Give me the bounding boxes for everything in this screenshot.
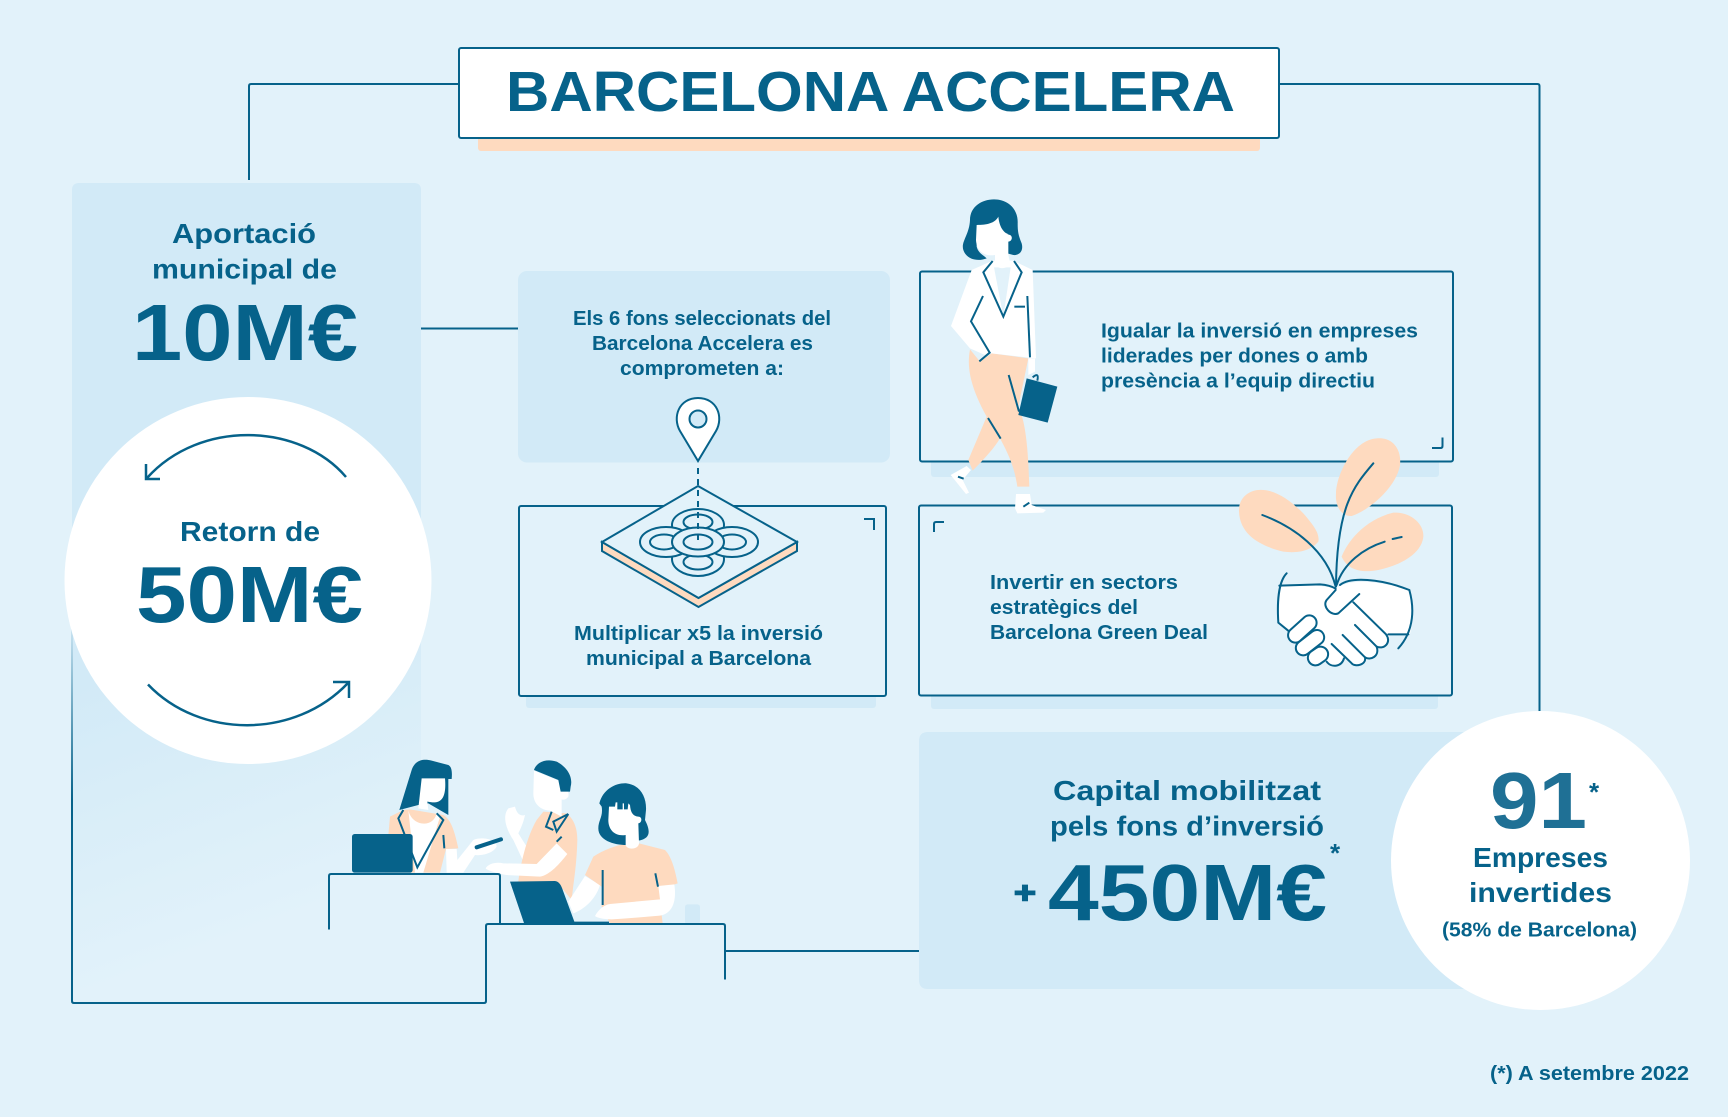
number: 50M€: 50M€ [136,550,363,639]
number: +450M€ [1014,838,1341,937]
icon: isometric tile with pin [602,398,797,607]
title [459,48,1279,151]
figure: woman with t-shirt [568,783,700,924]
panel: commitments intro: Barcelona Accelera es [592,333,813,355]
heading: capital [1050,775,1324,842]
card: multiply x5 [519,506,886,708]
illustration: handshake with plant [1239,438,1423,668]
illustration: walking woman [951,199,1057,513]
illustration: team at desks [352,760,700,924]
stepped outline frame [72,620,486,1003]
heading: capital: pels fons d’inversió [1050,810,1324,842]
heading: retorn: Retorn de [180,516,320,547]
heading: aportació [152,218,337,284]
label: empreses invertides: invertides [1469,877,1612,908]
figure: woman with laptop [352,760,501,873]
companies circle [1391,711,1690,1010]
heading: aportació: Aportació [172,218,316,249]
connector lines from title [249,84,1540,720]
number: 91: 91 [1490,756,1587,845]
panel: commitments intro: Els 6 fons seleccionats del [573,308,831,330]
card: equal investment women: presència a l’equip directiu [1101,370,1375,392]
number: +450M€: * [1330,838,1341,868]
capital panel [919,732,1480,989]
number: 10M€: 10M€ [132,288,358,377]
heading: capital: Capital mobilitzat [1053,775,1321,806]
card: green deal [919,506,1452,709]
panel: commitments intro: comprometen a: [620,358,784,380]
figure: man gesturing [486,760,577,900]
footnote: (*) A setembre 2022 [1490,1063,1689,1085]
laptop [510,881,609,924]
connector capital to team [725,950,919,952]
card: equal investment women: liderades per dones o amb [1101,346,1368,368]
heading: aportació: municipal de [152,254,337,284]
panel: commitments intro [518,271,890,462]
card: green deal: Invertir en sectors [990,572,1178,594]
label: empreses invertides: (58% de Barcelona) [1442,920,1637,942]
connector 10M to commitments [421,328,518,330]
arrow: bottom arc [148,682,349,725]
desk 1 [329,874,500,930]
asterisk: * [1589,777,1600,807]
arrow: top arc [146,435,346,479]
label: empreses invertides [1442,842,1637,942]
card: equal investment women: Igualar la inversió en empreses [1101,320,1418,342]
card: multiply x5: municipal a Barcelona [586,648,812,670]
label: empreses invertides: Empreses [1473,842,1608,873]
card: green deal: Barcelona Green Deal [990,622,1208,644]
icon: map pin [677,398,719,461]
card: green deal: estratègics del [990,597,1138,619]
number: +450M€: + [1014,877,1036,910]
return circle [64,397,432,764]
number: +450M€: 450M€ [1048,848,1327,937]
desk outlines [329,874,725,1001]
card: equal investment women [920,272,1453,477]
card: multiply x5: Multiplicar x5 la inversió [574,623,823,645]
panel: municipal contribution [72,183,421,1003]
title: BARCELONA ACCELERA [506,60,1235,123]
